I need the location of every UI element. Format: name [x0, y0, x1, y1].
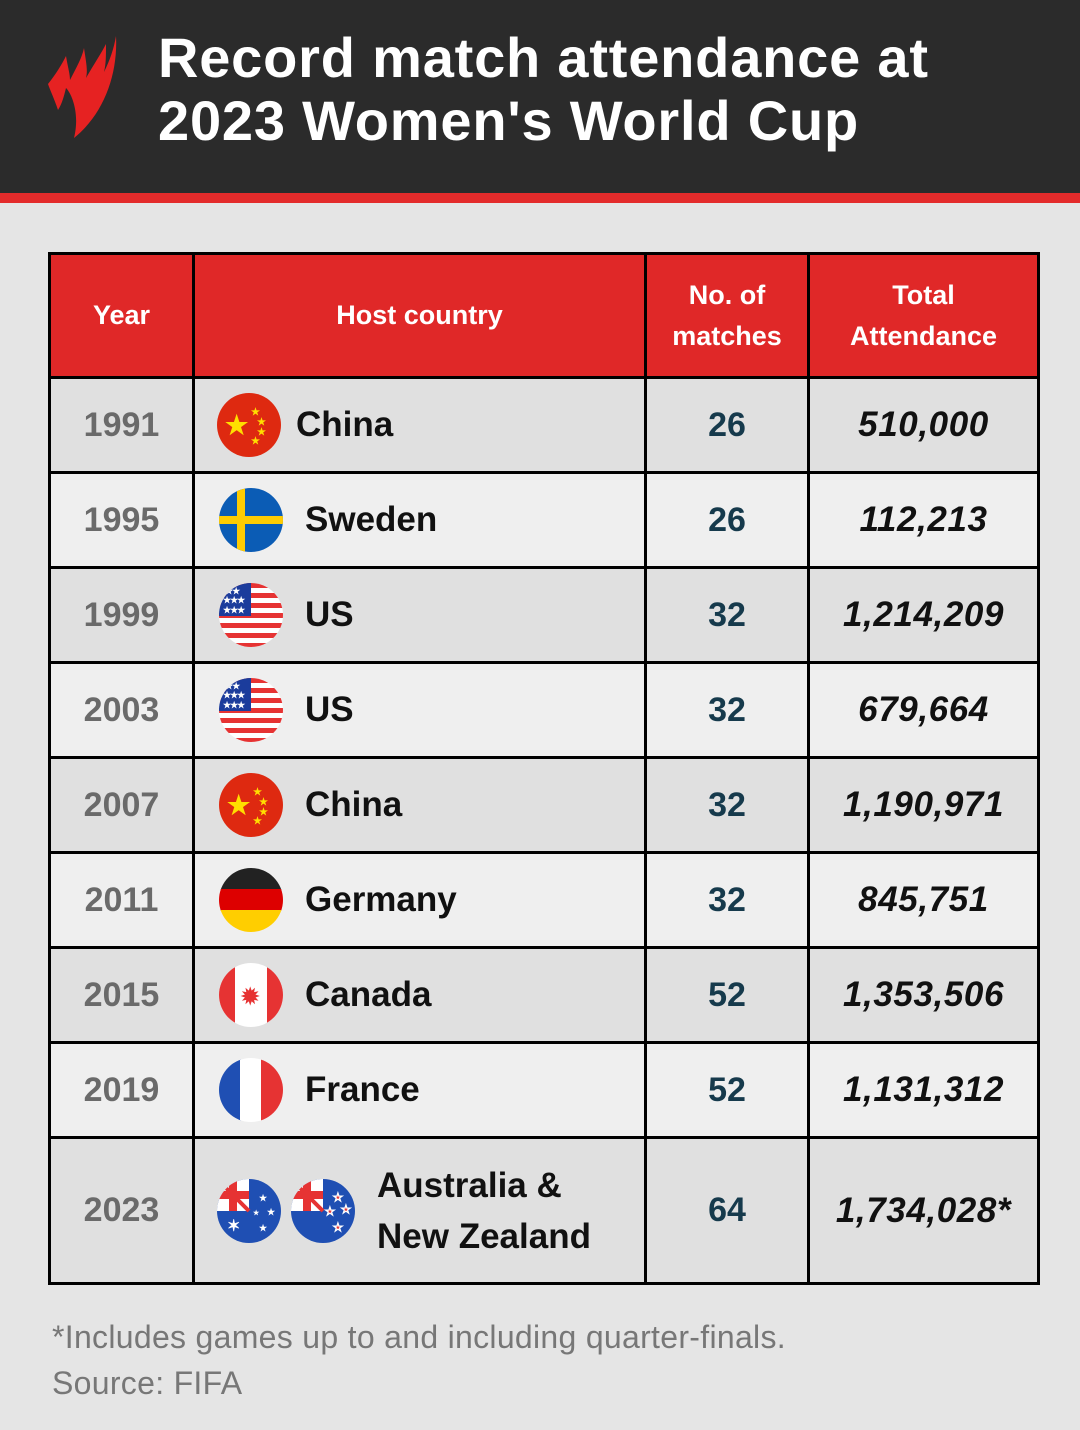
table: 32 — [708, 596, 746, 634]
table: ★ — [341, 1204, 351, 1216]
table: Australia & — [377, 1166, 562, 1204]
table: ★ — [251, 436, 260, 447]
table: ★★★ — [223, 595, 246, 605]
table: ★ — [259, 1222, 268, 1232]
row 2003 — [51, 664, 192, 756]
table: 1,353,506 — [843, 975, 1004, 1014]
table: ★ — [253, 1208, 260, 1216]
title: 2023 Women's World Cup — [158, 89, 859, 152]
table: ✶ — [227, 1218, 240, 1234]
table: US — [305, 595, 354, 634]
row 2011 — [51, 854, 192, 946]
table: Sweden — [305, 500, 437, 539]
table: 112,213 — [859, 500, 988, 539]
row 2019: 2019 — [84, 1070, 159, 1108]
table: matches — [672, 320, 782, 350]
table: ✹ — [240, 984, 260, 1009]
table: ★ — [253, 787, 262, 798]
table: 1,214,209 — [843, 595, 1004, 634]
table: ★★ — [225, 586, 241, 596]
table: ★★★ — [223, 700, 244, 710]
table: 52 — [708, 1070, 746, 1108]
title — [158, 26, 929, 152]
table: Canada — [305, 975, 431, 1014]
table: 32 — [708, 880, 746, 918]
table: 32 — [708, 690, 746, 728]
table: 1,190,971 — [843, 785, 1004, 824]
table: 1,131,312 — [843, 1070, 1004, 1109]
table: ★ — [259, 1192, 268, 1202]
table: Attendance — [850, 320, 997, 350]
row 2007 — [51, 759, 192, 851]
table: 32 — [708, 786, 746, 824]
table: ★ — [325, 1206, 335, 1218]
row 1999: 1999 — [84, 596, 159, 634]
table: 64 — [708, 1191, 746, 1229]
row 1991 — [51, 379, 192, 471]
row 1995 — [51, 474, 192, 566]
row 2007: 2007 — [84, 786, 159, 824]
table: ★ — [333, 1192, 343, 1204]
table: China — [305, 785, 402, 824]
table: 1,734,028* — [836, 1190, 1011, 1230]
row 2019 — [51, 1044, 192, 1136]
table: ★ — [257, 427, 266, 438]
row 2011: 2011 — [85, 880, 158, 918]
table: 26 — [708, 500, 746, 538]
table: ★★ — [225, 681, 241, 691]
table: ★ — [259, 807, 268, 818]
row 2015: 2015 — [84, 976, 159, 1014]
footnote — [52, 1319, 786, 1401]
footnote: *Includes games up to and including quarter-finals. — [52, 1319, 786, 1355]
table: US — [305, 690, 354, 729]
table: France — [305, 1070, 420, 1109]
header — [0, 0, 1080, 193]
table — [48, 252, 1040, 1285]
table: ★★★ — [223, 690, 246, 700]
table: ★ — [253, 816, 262, 827]
logo — [48, 36, 116, 138]
table: New Zealand — [377, 1216, 591, 1256]
table: 679,664 — [858, 690, 989, 729]
table: ★ — [257, 417, 266, 428]
header row — [51, 255, 192, 376]
row 1999 — [51, 569, 192, 661]
table: Total — [892, 280, 955, 310]
table: China — [296, 405, 393, 444]
table: ★ — [251, 407, 260, 418]
table: 52 — [708, 976, 746, 1014]
row 1991: 1991 — [84, 406, 159, 444]
row 2023 — [51, 1139, 192, 1282]
header row: Year — [93, 300, 150, 330]
row 2015 — [51, 949, 192, 1041]
table: 845,751 — [858, 880, 989, 919]
table: ★ — [225, 410, 249, 440]
table: ★ — [333, 1222, 343, 1234]
row 2023: 2023 — [84, 1191, 159, 1229]
table: 510,000 — [858, 405, 989, 444]
table: 26 — [708, 406, 746, 444]
row 2003: 2003 — [84, 690, 159, 728]
table: Host country — [336, 300, 503, 330]
table: No. of — [689, 280, 765, 310]
footnote: Source: FIFA — [52, 1365, 242, 1401]
table: ★★★ — [223, 605, 244, 615]
table: ★ — [259, 797, 268, 808]
table: Germany — [305, 880, 457, 919]
row 1995: 1995 — [84, 500, 159, 538]
table: ★ — [267, 1206, 276, 1216]
table: ★ — [227, 790, 251, 820]
title: Record match attendance at — [158, 26, 929, 89]
